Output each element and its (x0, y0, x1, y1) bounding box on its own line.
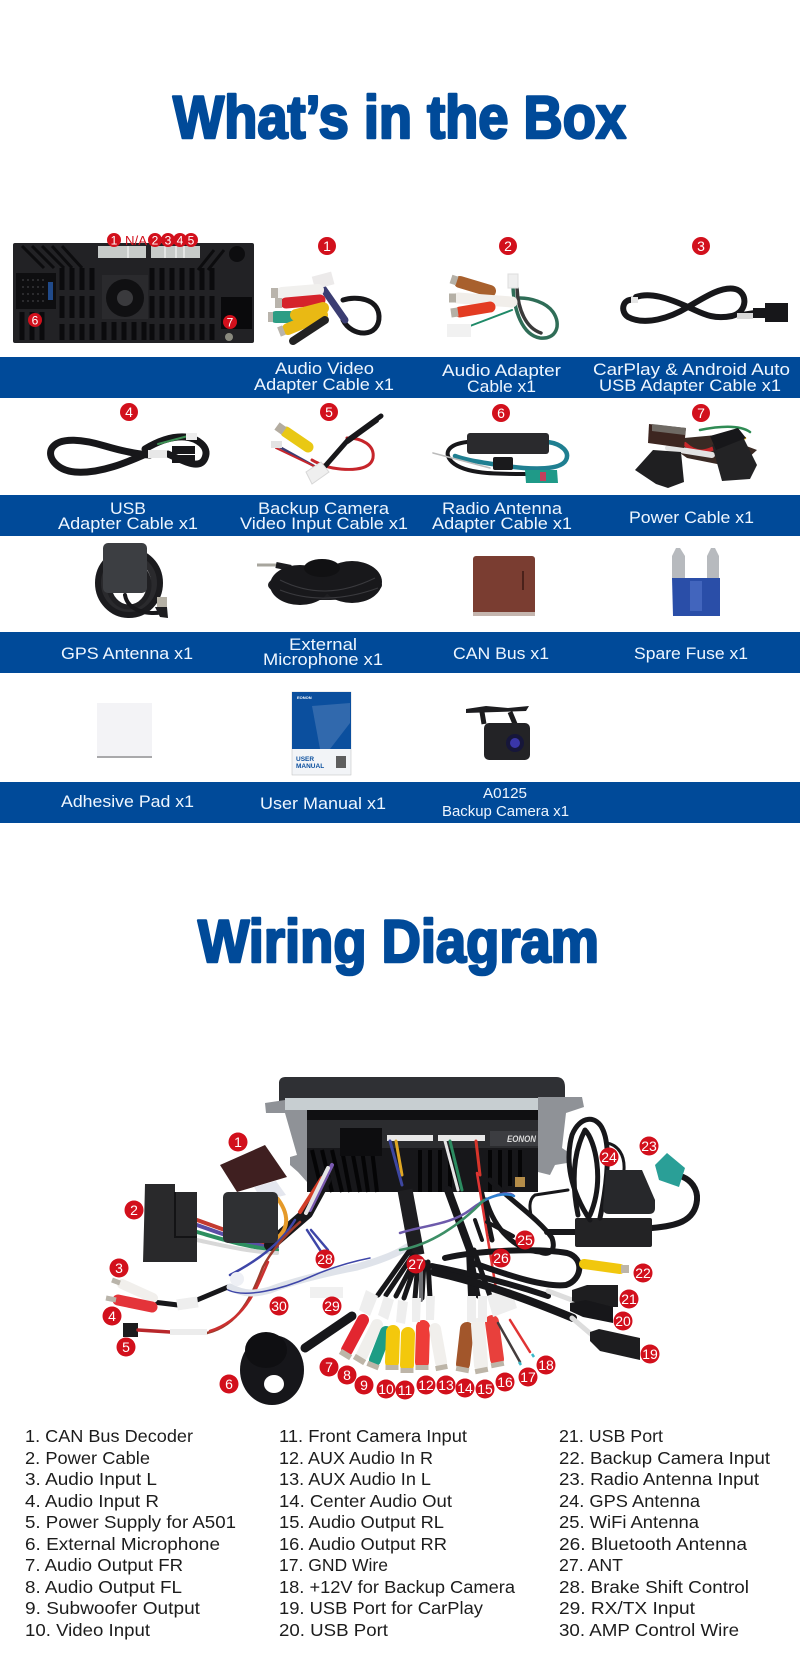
label band row 4: Adhesive Pad x1 (61, 792, 194, 811)
legend column 3: 28. Brake Shift Control (559, 1577, 749, 1597)
label band row 2: Radio Antenna (442, 499, 563, 518)
markers: 6 (225, 1376, 233, 1392)
markers: 4 (108, 1308, 116, 1324)
item: adhesive pad (97, 703, 152, 758)
label band row 2: Backup Camera (258, 499, 390, 518)
markers: 21 (621, 1291, 637, 1307)
legend (25, 1426, 770, 1640)
markers: 12 (418, 1377, 434, 1393)
radio unit rear (265, 1077, 584, 1192)
central wire bundles and RCA outputs (344, 1173, 534, 1373)
markers: 15 (477, 1381, 493, 1397)
label band row 3: CAN Bus x1 (453, 644, 549, 663)
marker row on head unit: 1 (111, 234, 118, 248)
label band row 2: Adapter Cable x1 (58, 514, 198, 533)
item 6: radio antenna adapter cable: 6 (497, 405, 505, 421)
markers: 24 (601, 1149, 617, 1165)
legend column 1: 2. Power Cable (25, 1448, 150, 1468)
panel: box contents (0, 233, 800, 823)
legend column 2: 19. USB Port for CarPlay (279, 1598, 483, 1618)
item 6: radio antenna adapter cable (433, 404, 567, 483)
markers: 7 (325, 1359, 333, 1375)
markers: 26 (493, 1250, 509, 1266)
marker row on head unit: 4 (177, 234, 184, 248)
audio inputs 3 and 4 (106, 1280, 228, 1310)
legend column 1: 9. Subwoofer Output (25, 1598, 200, 1618)
markers: 23 (641, 1138, 657, 1154)
label band row 3: GPS Antenna x1 (61, 644, 193, 663)
icon: head unit rear panel (13, 233, 254, 343)
wiring harness (197, 1165, 332, 1333)
label band row 4: Backup Camera x1 (442, 803, 569, 820)
legend column 3: 24. GPS Antenna (559, 1491, 700, 1511)
marker row on head unit: N/A (125, 233, 147, 248)
item: user manual: EONON (297, 695, 312, 700)
item 1: audio video adapter cable (268, 237, 379, 341)
marker row on head unit: 2 (152, 234, 159, 248)
legend column 1: 10. Video Input (25, 1620, 150, 1640)
radio unit rear: EONON (507, 1134, 537, 1145)
legend column 1: 6. External Microphone (25, 1534, 220, 1554)
legend column 1: 5. Power Supply for A501 (25, 1512, 236, 1532)
label band row 3: External (289, 635, 357, 654)
item 3: CarPlay and Android Auto USB adapter cable: 3 (697, 238, 705, 254)
label band row 2: Power Cable x1 (629, 508, 754, 527)
radio antenna adapter 23 (547, 1153, 697, 1247)
legend column 1: 4. Audio Input R (25, 1491, 159, 1511)
legend column 1: 8. Audio Output FL (25, 1577, 182, 1597)
item: user manual: USER (296, 756, 314, 763)
markers: 17 (520, 1369, 536, 1385)
label band row 1: Audio Adapter (442, 361, 561, 380)
GPS antenna 24 (530, 1119, 655, 1220)
markers: 3 (115, 1260, 123, 1276)
markers: 22 (635, 1265, 651, 1281)
item: spare fuse (672, 548, 720, 616)
markers: 16 (497, 1374, 513, 1390)
heading: Wiring Diagram: Wiring Diagram (198, 908, 599, 975)
item 5: backup camera video input cable: 5 (325, 404, 333, 420)
markers: 1 (234, 1134, 242, 1150)
icon: head unit rear panel: 6 (32, 314, 39, 328)
markers: 5 (122, 1339, 130, 1355)
label band row 2: USB (110, 499, 146, 518)
legend column 1: 1. CAN Bus Decoder (25, 1426, 193, 1446)
item 1: audio video adapter cable: 1 (323, 238, 331, 254)
item 4: USB adapter cable (51, 403, 206, 472)
markers: 11 (398, 1382, 412, 1398)
label band row 1 (0, 357, 800, 398)
markers: 14 (457, 1380, 473, 1396)
item: user manual: MANUAL (296, 763, 324, 770)
legend column 3 (559, 1426, 770, 1640)
markers: 10 (378, 1381, 394, 1397)
label band row 2 (0, 495, 800, 536)
label band row 3 (0, 632, 800, 673)
external microphone 6 (240, 1316, 352, 1405)
markers: 2 (130, 1202, 138, 1218)
markers: 20 (615, 1313, 631, 1329)
legend column 1: 3. Audio Input L (25, 1469, 157, 1489)
item: CAN bus (473, 556, 535, 616)
legend column 2: 18. +12V for Backup Camera (279, 1577, 515, 1597)
item 3: CarPlay and Android Auto USB adapter cable (623, 237, 788, 322)
markers: 18 (538, 1357, 554, 1373)
label band row 4: A0125 (483, 785, 527, 802)
item 7: power cable: 7 (697, 405, 705, 421)
item: GPS antenna (99, 543, 168, 618)
legend column 2: 16. Audio Output RR (279, 1534, 447, 1554)
icon: head unit rear panel: 7 (227, 316, 234, 330)
legend column 3: 26. Bluetooth Antenna (559, 1534, 747, 1554)
item 5: backup camera video input cable (271, 403, 381, 484)
legend column 3: 29. RX/TX Input (559, 1598, 695, 1618)
markers (102, 1132, 660, 1400)
label band row 3: Spare Fuse x1 (634, 644, 748, 663)
markers: 28 (317, 1251, 333, 1267)
item 7: power cable (635, 404, 757, 488)
label band row 4 (0, 782, 800, 823)
legend column 2: 11. Front Camera Input (279, 1426, 467, 1446)
marker row on head unit: 3 (165, 234, 172, 248)
marker row on head unit (107, 233, 198, 248)
markers: 29 (324, 1298, 340, 1314)
legend column 2: 14. Center Audio Out (279, 1491, 452, 1511)
label band row 2: Video Input Cable x1 (240, 514, 408, 533)
markers: 8 (343, 1367, 351, 1383)
power connector (143, 1184, 197, 1262)
antenna leads 25 and 26 (400, 1177, 553, 1253)
item 2: audio adapter cable: 2 (504, 238, 512, 254)
legend column 3: 25. WiFi Antenna (559, 1512, 699, 1532)
markers: 9 (360, 1377, 368, 1393)
power lead 5 (123, 1323, 207, 1337)
legend column 3: 22. Backup Camera Input (559, 1448, 770, 1468)
label band row 1: Adapter Cable x1 (254, 375, 394, 394)
item: backup camera (466, 706, 530, 760)
label band row 1: Audio Video (275, 359, 374, 378)
label band row 1: CarPlay & Android Auto (593, 360, 790, 379)
markers: 27 (408, 1256, 424, 1272)
legend column 2: 13. AUX Audio In L (279, 1469, 431, 1489)
label band row 1: Cable x1 (467, 377, 536, 396)
legend column 3: 21. USB Port (559, 1426, 663, 1446)
panel: wiring diagram (102, 1077, 697, 1405)
label band row 1: USB Adapter Cable x1 (599, 376, 781, 395)
marker row on head unit: 5 (188, 234, 195, 248)
legend column 2: 15. Audio Output RL (279, 1512, 444, 1532)
item 4: USB adapter cable: 4 (125, 404, 133, 420)
legend column 1: 7. Audio Output FR (25, 1555, 183, 1575)
CAN bus decoder (220, 1145, 287, 1201)
legend column 3: 27. ANT (559, 1555, 623, 1575)
markers: 30 (271, 1298, 287, 1314)
heading: What's in the Box: What’s in the Box (173, 84, 626, 151)
item: user manual (292, 692, 351, 775)
legend column 2: 20. USB Port (279, 1620, 388, 1640)
legend column 3: 30. AMP Control Wire (559, 1620, 739, 1640)
USB and camera leads (432, 1250, 640, 1360)
legend column 2 (279, 1426, 515, 1640)
legend column 1 (25, 1426, 236, 1640)
item 2: audio adapter cable (447, 237, 557, 338)
legend column 2: 12. AUX Audio In R (279, 1448, 433, 1468)
white control wire bundle (228, 1247, 407, 1298)
markers: 25 (517, 1232, 533, 1248)
black module (223, 1192, 278, 1243)
legend column 3: 23. Radio Antenna Input (559, 1469, 759, 1489)
label band row 4: User Manual x1 (260, 794, 386, 813)
label band row 2: Adapter Cable x1 (432, 514, 572, 533)
legend column 2: 17. GND Wire (279, 1555, 388, 1575)
markers: 13 (438, 1377, 454, 1393)
item: external microphone (257, 559, 382, 605)
markers: 19 (642, 1346, 658, 1362)
label band row 3: Microphone x1 (263, 650, 383, 669)
